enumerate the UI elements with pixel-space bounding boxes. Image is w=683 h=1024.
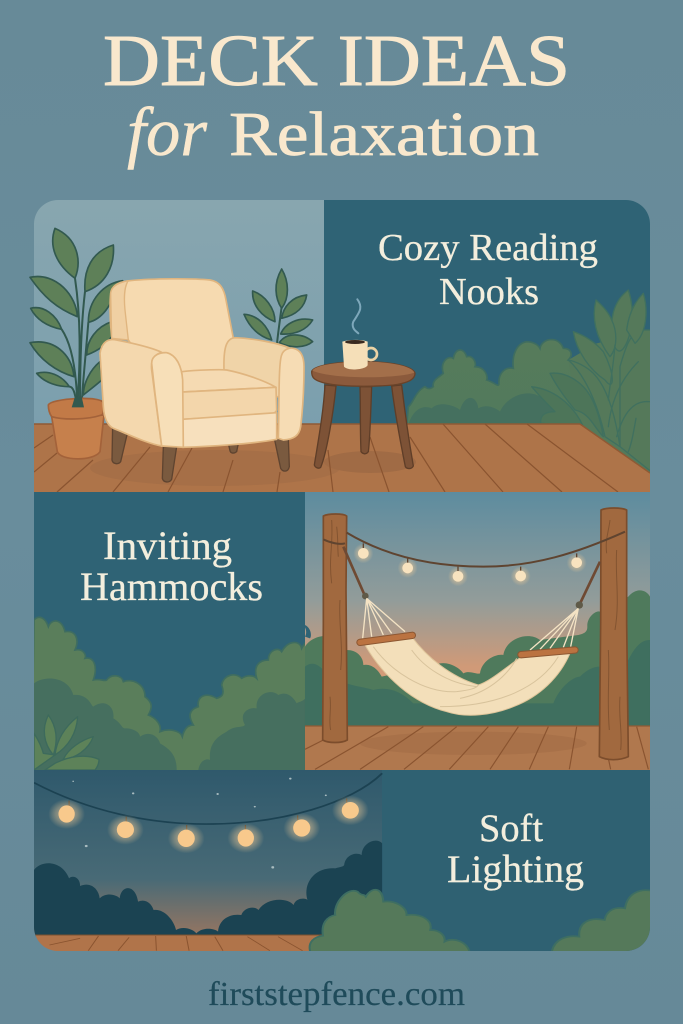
string lights	[34, 773, 382, 853]
deck: reading nook	[34, 424, 650, 493]
bulbs	[353, 543, 587, 586]
deck and scene: hammock	[305, 590, 650, 770]
heading: Soft Lighting	[447, 807, 584, 891]
hammock straps	[343, 547, 600, 605]
string light rope	[323, 532, 625, 567]
icon: side table with coffee cup	[312, 299, 415, 469]
footer website: firststepfence.com	[208, 976, 465, 1013]
teal label block: lighting	[382, 770, 650, 951]
stars	[72, 778, 327, 868]
tree silhouette	[34, 841, 382, 937]
panel: reading nook	[34, 200, 653, 497]
panel: soft lighting	[34, 770, 654, 953]
icon: armchair	[100, 279, 304, 482]
label line: Soft: Soft	[479, 807, 543, 850]
bushes behind hammock	[305, 590, 650, 726]
icon: large potted plant	[30, 228, 123, 459]
main card panel	[32, 200, 654, 953]
icon: small plant behind chair	[244, 269, 313, 347]
right wooden post	[599, 508, 628, 760]
label line: Nooks: Nooks	[439, 271, 539, 313]
panel: hammocks	[32, 492, 650, 772]
heading: Cozy Reading Nooks	[379, 233, 598, 305]
sunset sky	[305, 492, 650, 677]
title line: Deck Ideas: DECK IDEAS	[103, 20, 570, 101]
front bushes	[310, 890, 654, 953]
label line: Cozy Reading: Cozy Reading	[378, 227, 598, 269]
title word: Relaxation: Relaxation	[229, 101, 539, 169]
hammock spreader bars	[360, 635, 575, 655]
label line: Inviting: Inviting	[103, 523, 232, 568]
hammock fabric	[365, 637, 570, 715]
title	[103, 20, 570, 170]
left wooden post	[323, 514, 347, 742]
icon: hammock with posts and lights	[323, 508, 628, 760]
heading: Inviting Hammocks	[81, 532, 262, 601]
title word: for: for	[127, 94, 208, 170]
teal label block: hammocks	[34, 492, 305, 734]
deck: lighting	[35, 934, 322, 951]
label line: Lighting: Lighting	[447, 848, 584, 891]
night sky	[34, 770, 382, 951]
foliage behind deck	[406, 290, 650, 472]
teal label block: reading nook	[324, 200, 650, 426]
label line: Hammocks: Hammocks	[80, 564, 263, 609]
room wall	[34, 200, 324, 426]
bushes: hammock label block	[32, 617, 315, 772]
